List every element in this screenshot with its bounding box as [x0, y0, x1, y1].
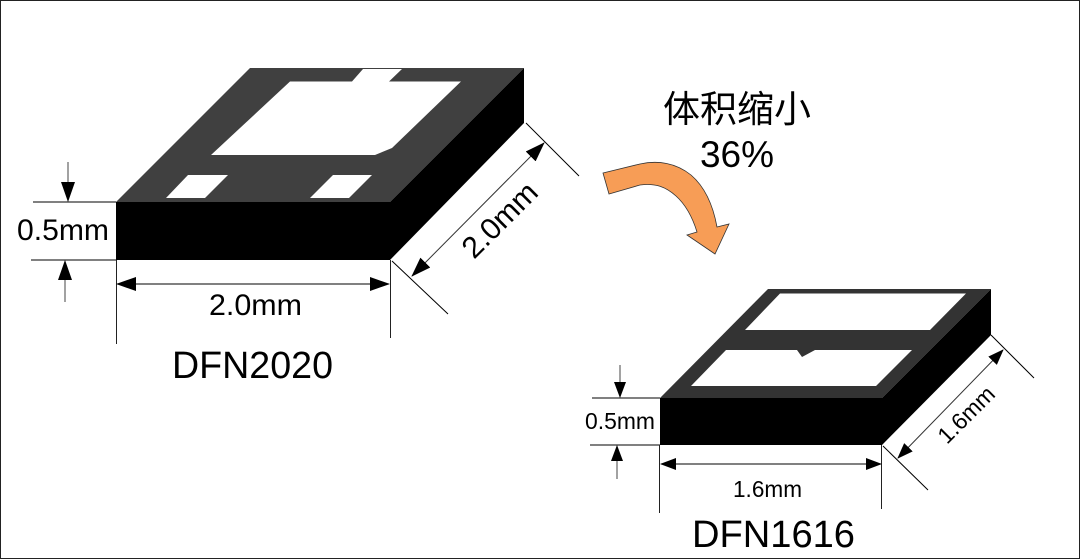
height dimension 0.5mm	[17, 162, 116, 302]
depth dimension 2.0mm: 2.0mm	[456, 176, 545, 265]
height dimension 0.5mm: 0.5mm	[585, 408, 655, 434]
label DFN1616: DFN1616	[692, 514, 855, 556]
chip body DFN1616	[660, 289, 991, 445]
label DFN2020: DFN2020	[172, 345, 333, 387]
width dimension 2.0mm	[116, 260, 390, 344]
chip body DFN2020	[116, 68, 524, 260]
depth dimension 1.6mm: 1.6mm	[932, 381, 1000, 449]
package: DFN2020	[17, 68, 579, 387]
width dimension 1.6mm	[660, 445, 882, 513]
depth dimension 1.6mm	[883, 335, 1034, 490]
width dimension 2.0mm: 2.0mm	[209, 289, 302, 322]
callout: volume reduced 36%: 36%	[700, 134, 774, 175]
depth dimension 2.0mm	[392, 123, 579, 314]
callout: volume reduced 36%: 体积缩小	[663, 89, 811, 130]
arrow: curved orange	[603, 162, 729, 254]
height dimension 0.5mm: 0.5mm	[17, 214, 109, 247]
package: DFN1616	[585, 289, 1034, 556]
height dimension 0.5mm	[585, 365, 660, 479]
callout: volume reduced 36%	[663, 89, 811, 175]
width dimension 1.6mm: 1.6mm	[733, 476, 802, 502]
